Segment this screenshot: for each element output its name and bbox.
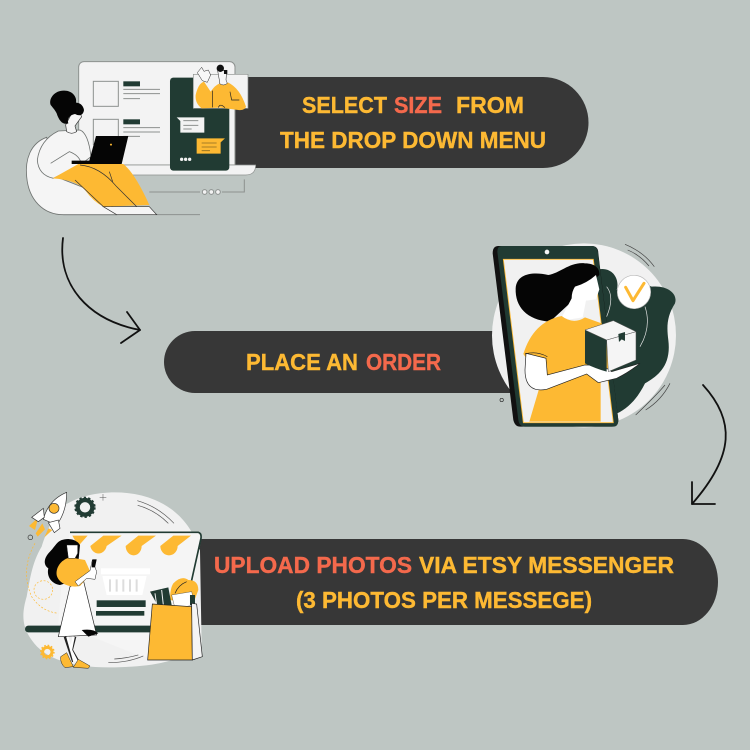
step 1 banner [235, 77, 588, 168]
shop counter [25, 600, 158, 632]
step 3 banner: (3 PHOTOS PER MESSEGE) [296, 587, 592, 613]
step 3 banner [190, 539, 718, 625]
step 3 banner: UPLOAD PHOTOS [214, 552, 412, 578]
beanbag [26, 137, 117, 215]
gear icon [75, 498, 95, 517]
woman face and arm [67, 545, 97, 586]
laptop base [79, 165, 256, 175]
illustration: woman with parcel in phone [492, 243, 676, 427]
ellipsis line [63, 179, 244, 215]
background blob [23, 492, 202, 667]
motion lines [625, 244, 670, 415]
woman top [57, 557, 91, 587]
hair [516, 263, 599, 322]
step 2 banner: ORDER [366, 349, 441, 375]
decorative marks [27, 494, 174, 663]
woman legs and shoes [61, 637, 90, 668]
illustration: woman with laptop [26, 62, 256, 215]
shop basket [101, 568, 150, 595]
torso [37, 130, 91, 178]
arm [525, 353, 640, 390]
step 3 banner: VIA ETSY MESSENGER [419, 552, 674, 578]
woman dress [58, 580, 97, 637]
step 2 banner [164, 331, 520, 393]
laptop screen [79, 62, 235, 165]
check badge [617, 275, 651, 309]
arrow: step 1 to step 2 [62, 238, 140, 343]
chat panel [170, 78, 229, 171]
shopping bag [148, 578, 202, 660]
phone [493, 246, 618, 427]
shop awning [58, 532, 202, 657]
hair [50, 91, 84, 124]
woman hair [45, 539, 80, 585]
plant leaves [598, 269, 676, 415]
small ring [500, 398, 503, 402]
product list [93, 81, 160, 144]
small gear icon [41, 645, 54, 659]
trousers [53, 164, 149, 207]
background circle [492, 243, 676, 427]
box [585, 321, 636, 372]
shirt [523, 316, 613, 422]
face and neck [562, 275, 599, 319]
laptop [72, 136, 128, 164]
step 1 banner: THE DROP DOWN MENU [280, 127, 546, 153]
step 1 banner: FROM [456, 92, 524, 118]
step 1 banner: SIZE [394, 92, 442, 118]
step 2 banner: PLACE AN [246, 349, 358, 375]
feet [103, 207, 157, 215]
neck and face [66, 113, 82, 133]
video call window [193, 65, 248, 110]
rocket [29, 492, 67, 537]
step 1 banner: SELECT [302, 92, 387, 118]
illustration: shop and shopping bag [23, 492, 202, 668]
arrow: step 2 to step 3 [692, 385, 726, 504]
